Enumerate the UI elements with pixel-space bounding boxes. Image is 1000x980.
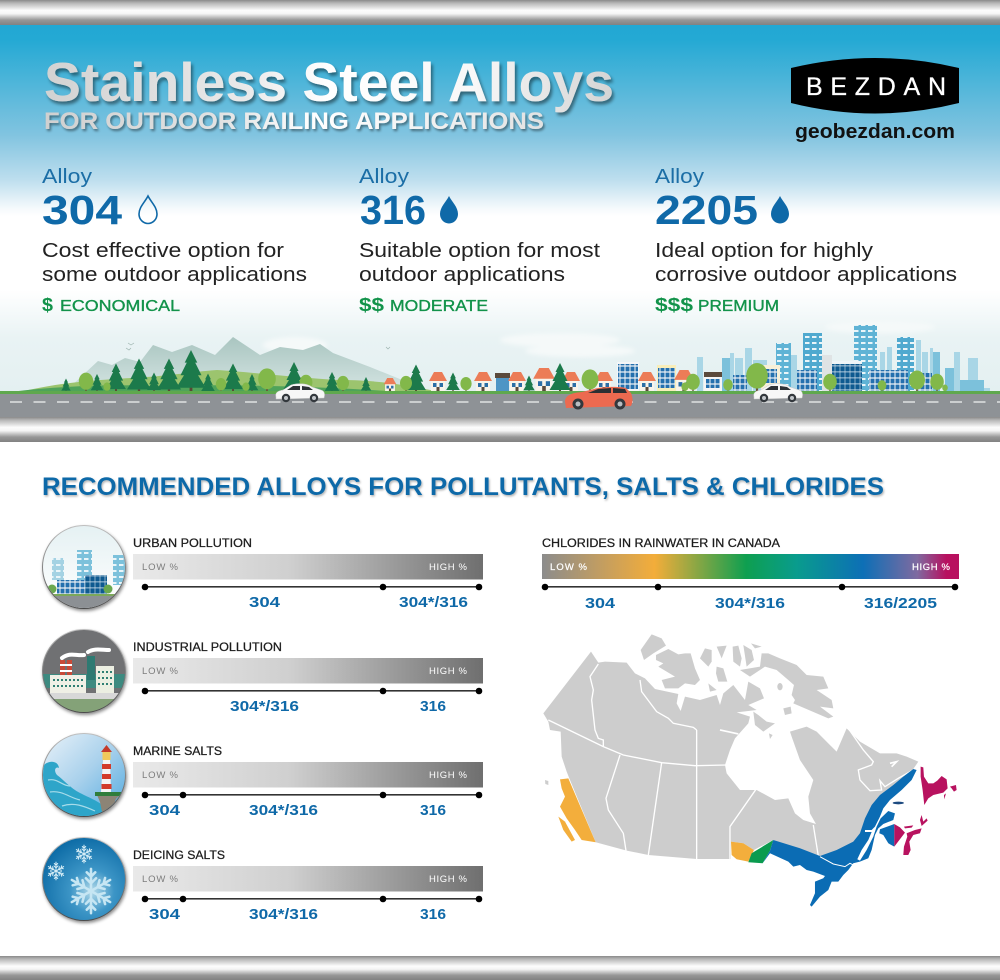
round trees	[79, 363, 948, 392]
chart title: CHLORIDES IN RAINWATER IN CANADA	[542, 538, 780, 550]
white car right	[754, 384, 803, 402]
region: 304 western Ontario	[731, 842, 754, 862]
alloy labels: 304	[149, 802, 181, 819]
scale line	[142, 688, 482, 694]
title: Stainless Steel Alloys	[44, 51, 614, 113]
row: deicing salts	[42, 837, 483, 923]
row title: DEICING SALTS	[133, 850, 225, 862]
icon: city	[42, 525, 126, 610]
St Lawrence border line	[820, 857, 853, 867]
pine trees	[61, 350, 571, 393]
gradient bar: LOW %	[142, 562, 179, 573]
gradient bar: HIGH %	[429, 666, 468, 677]
alloy number: 316	[360, 187, 426, 233]
alloy labels: 316/2205	[864, 595, 937, 612]
scale line	[142, 896, 482, 902]
row: marine salts	[42, 733, 483, 819]
panel: alloy 2205	[655, 166, 957, 315]
road	[0, 393, 1000, 417]
alloy label: Alloy	[42, 166, 92, 188]
downtown mid-rise buildings	[495, 362, 722, 392]
region: 304*/316 green	[748, 840, 773, 863]
white channels	[678, 689, 897, 767]
top rail	[0, 0, 1000, 25]
map of Canada	[543, 634, 957, 907]
icon: filled drop	[440, 196, 458, 224]
mountains	[70, 337, 432, 392]
alloy labels: 304*/316	[399, 594, 468, 611]
price tier: ECONOMICAL	[60, 298, 180, 315]
price tier: PREMIUM	[698, 298, 779, 315]
panel: sky header	[0, 25, 1000, 395]
white car left	[276, 384, 325, 402]
description: corrosive outdoor applications	[655, 264, 957, 286]
alloy labels	[230, 698, 446, 715]
grass strip	[0, 391, 1000, 394]
description: Ideal option for highly	[655, 240, 873, 262]
alloy labels: 304	[149, 906, 181, 923]
panel: chlorides in rainwater	[542, 538, 959, 612]
alloy labels: 304*/316	[249, 802, 318, 819]
alloy label: Alloy	[655, 166, 704, 188]
description: outdoor applications	[359, 264, 565, 286]
scale line	[142, 584, 482, 590]
alloy number: 2205	[655, 187, 758, 233]
alloy labels: 304*/316	[715, 595, 785, 612]
office towers	[733, 325, 932, 392]
description: Suitable option for most	[359, 240, 600, 262]
gradient bar	[133, 658, 483, 684]
rainbow bar	[542, 554, 959, 579]
bottom rail	[0, 956, 1000, 980]
alloy label: Alloy	[359, 166, 409, 188]
middle rail	[0, 417, 1000, 442]
red car	[565, 387, 632, 410]
gradient bar	[133, 866, 483, 892]
alloy number: 304	[42, 187, 122, 233]
sky gradient	[0, 25, 1000, 395]
row title: INDUSTRIAL POLLUTION	[133, 642, 282, 654]
price tier: $	[42, 295, 53, 315]
clouds	[263, 321, 935, 357]
description: Cost effective option for	[42, 240, 284, 262]
region: 316/2205 blue	[763, 769, 917, 907]
alloy labels	[249, 594, 468, 611]
distant city skyline	[697, 340, 990, 392]
Anticosti island	[893, 802, 904, 804]
icon: outlined drop	[139, 196, 157, 224]
alloy labels: 316	[420, 698, 446, 715]
alloy labels: 304*/316	[249, 906, 318, 923]
price tier: $$	[359, 295, 384, 315]
scale line	[142, 792, 482, 798]
province borders	[548, 664, 915, 859]
gradient bar: LOW %	[142, 874, 179, 885]
foreground grass	[10, 385, 400, 392]
mainland	[543, 652, 918, 859]
icon: snowflakes	[42, 837, 126, 921]
green hills	[20, 370, 440, 392]
row title: MARINE SALTS	[133, 746, 222, 758]
subtitle: FOR OUTDOOR RAILING APPLICATIONS	[44, 108, 544, 135]
icon: filled drop	[771, 196, 789, 224]
price tier: $$$	[655, 295, 693, 315]
alloy labels: 316	[420, 906, 446, 923]
gradient bar: LOW %	[142, 770, 179, 781]
description: some outdoor applications	[42, 264, 307, 286]
row: industrial pollution	[42, 629, 483, 715]
alloy labels: 304	[249, 594, 281, 611]
row: urban pollution	[42, 525, 483, 611]
logo: Bezdan	[791, 58, 959, 114]
icon: lighthouse	[42, 733, 126, 817]
website: geobezdan.com	[795, 120, 955, 143]
alloy labels	[149, 906, 446, 923]
illustration: landscape and road	[0, 321, 1000, 417]
section heading: RECOMMENDED ALLOYS FOR POLLUTANTS, SALTS & CHLORIDES	[42, 473, 884, 501]
region: 304 British Columbia coast	[558, 778, 596, 842]
alloy labels: 316	[420, 802, 446, 819]
icon: factory	[42, 629, 126, 713]
Newfoundland magenta	[921, 767, 957, 805]
lane markings	[10, 401, 1000, 403]
scale line	[542, 584, 958, 590]
gradient bar	[133, 554, 483, 580]
Maritimes magenta	[894, 815, 928, 855]
gradient bar: HIGH %	[429, 562, 468, 573]
alloy labels: 304*/316	[230, 698, 299, 715]
row title: URBAN POLLUTION	[133, 538, 252, 550]
panel: alloy 316	[359, 166, 600, 315]
rainbow bar: HIGH %	[912, 562, 951, 573]
gradient bar: LOW %	[142, 666, 179, 677]
logo: Bezdan: BEZDAN	[806, 73, 946, 101]
price tier: MODERATE	[390, 298, 488, 315]
houses	[384, 368, 694, 392]
gradient bar	[133, 762, 483, 788]
rainbow bar: LOW %	[550, 562, 588, 573]
gradient bar: HIGH %	[429, 874, 468, 885]
birds	[126, 343, 390, 350]
panel: alloy 304	[42, 166, 307, 315]
arctic islands	[545, 634, 833, 785]
gradient bar: HIGH %	[429, 770, 468, 781]
alloy labels: 304	[585, 595, 616, 612]
alloy labels	[585, 595, 937, 612]
alloy labels	[149, 802, 446, 819]
